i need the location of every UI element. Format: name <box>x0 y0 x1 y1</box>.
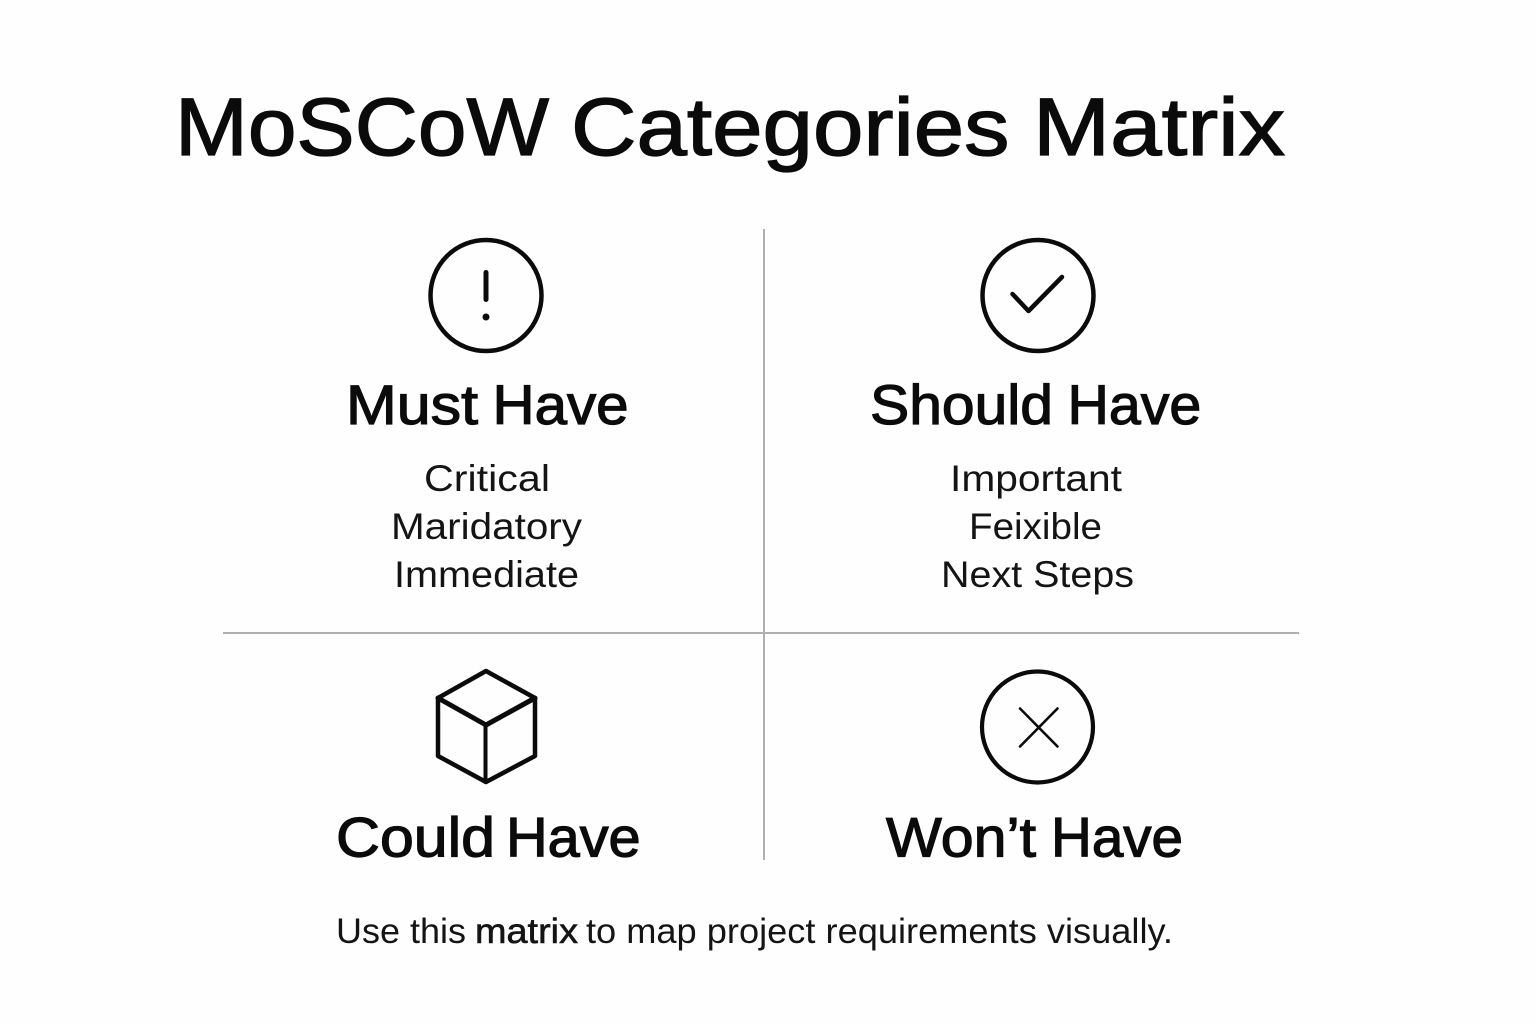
heading: could have: Have <box>506 806 641 868</box>
text block: should have attributes: Next Steps <box>941 554 1134 595</box>
heading: won't have: Won’t <box>886 806 1036 868</box>
footer note: matrix <box>475 912 579 951</box>
panel: could have <box>336 671 641 868</box>
heading: must have: Must <box>346 373 478 436</box>
heading: must have <box>346 373 628 436</box>
footer note <box>336 912 1173 951</box>
text block: should have attributes: Feixible <box>969 506 1102 547</box>
icon: x in circle <box>982 672 1093 782</box>
text block: should have attributes <box>941 458 1134 595</box>
footer note: to map project requirements visually. <box>586 912 1173 951</box>
heading: should have: Have <box>1068 373 1201 436</box>
text block: must have attributes: Critical <box>424 458 550 499</box>
footer note: Use this <box>336 912 466 951</box>
title: Categories <box>571 82 1010 173</box>
panel: must have <box>346 240 628 595</box>
icon: exclamation in circle <box>430 240 542 351</box>
icon: cube <box>438 671 535 782</box>
heading: should have: Should <box>870 373 1053 436</box>
heading: could have: Could <box>336 806 495 868</box>
heading: could have <box>336 806 641 868</box>
panel: won't have <box>886 672 1183 868</box>
text block: must have attributes: Maridatory <box>391 506 583 547</box>
title: Matrix <box>1033 82 1285 173</box>
title <box>175 82 1285 173</box>
heading: should have <box>870 373 1201 436</box>
panel: should have <box>870 240 1201 595</box>
heading: won't have: Have <box>1051 806 1183 868</box>
text block: must have attributes <box>391 458 583 595</box>
icon: check in circle <box>982 240 1094 351</box>
heading: must have: Have <box>492 373 628 436</box>
title: MoSCoW <box>175 82 550 173</box>
matrix grid <box>223 229 1299 860</box>
text block: should have attributes: Important <box>950 458 1123 499</box>
heading: won't have <box>886 806 1183 868</box>
text block: must have attributes: Immediate <box>394 554 579 595</box>
